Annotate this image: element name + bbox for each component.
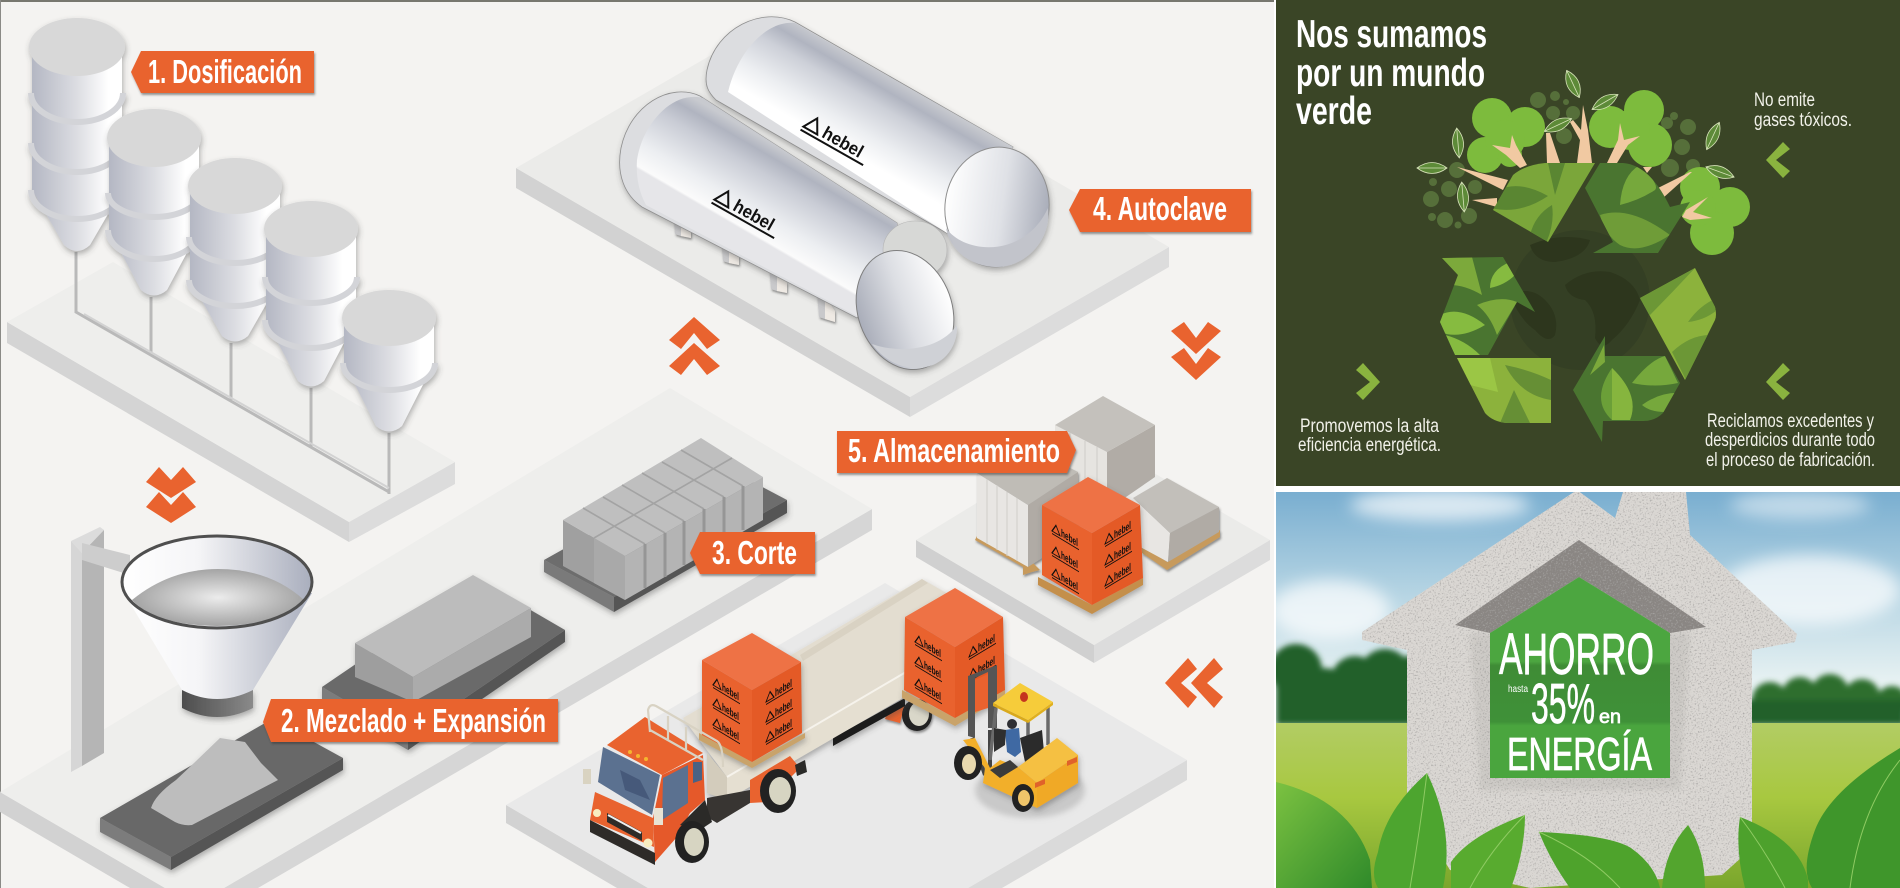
panel: energy saving photo [1270,489,1900,888]
text: savings [1498,632,1652,771]
back tank [706,17,1057,274]
label: step 5 [837,431,1076,473]
logo: hebel front tank [711,185,784,239]
silo 2 [107,109,201,296]
logos: forklift pallet left face: hebel [924,680,941,703]
arrow segment: left [1440,257,1535,355]
arrow segment: top right [1585,163,1690,253]
logo: hebel back tank: hebel [819,123,867,162]
label: step 2 [263,699,558,742]
tall grey stack [1055,396,1155,520]
logo: hebel back tank [800,112,873,166]
left white stack [975,448,1078,575]
orange pallet [1038,477,1143,614]
expansion tray with block [322,575,565,750]
background dots [1423,91,1700,228]
heading: verde [1296,90,1372,133]
platform: mixing and cutting [0,388,872,888]
body [963,738,1078,808]
text: energy efficiency: Promovemos la alta [1300,416,1439,437]
logos: storage pallet right face: hebel [1114,539,1131,562]
storage pallets [975,396,1220,614]
truck [583,579,1005,865]
arrow segment: right [1640,268,1716,380]
meadow [1276,723,1900,888]
recess shading [1470,633,1690,790]
panel: green world [1276,0,1900,486]
autoclave tanks [620,17,1057,383]
logos: near pallet right face: hebel [775,696,792,719]
heading [1296,13,1487,133]
arrow: down to storage [1171,322,1221,380]
logos: storage pallet left face: hebel [1061,526,1078,549]
front tank [620,92,970,383]
text: savings: 35% [1531,672,1595,736]
chassis [707,790,750,823]
logos: forklift pallet left face: hebel [924,637,941,660]
funnel mixer [71,527,312,772]
label: step 5: 5. Almacenamiento [848,432,1060,469]
logos: near pallet right face: hebel [775,676,792,699]
logos: storage pallet right face: hebel [1114,560,1131,583]
cargo: orange pallet on forks [902,588,1005,726]
clouds [1270,489,1900,640]
trailer wheel and fender [885,699,932,731]
text: savings: ENERGÍA [1507,728,1652,780]
logos: forklift pallet right face [969,631,996,682]
label: step 2: 2. Mezclado + Expansión [281,702,546,739]
forklift shadow [975,762,1085,818]
support feet [673,210,835,322]
green sign [1490,577,1670,778]
cab guard rail [648,705,723,767]
panel: production process [0,0,1274,888]
chevron: recycling [1766,363,1790,400]
rear axle wheel [750,756,807,813]
arrow segment: bottom right [1573,336,1680,442]
logos: storage pallet right face: hebel [1114,518,1131,541]
cargo: orange pallet near [699,633,805,768]
recess roof shadow [1455,540,1706,633]
arrow: left to truck [1165,658,1223,708]
label: step 3: 3. Corte [712,534,797,571]
logos: forklift pallet right face: hebel [978,631,995,654]
logos: storage pallet left face: hebel [1061,548,1078,571]
text: no toxic gases [1754,90,1852,131]
right stack [1133,478,1220,570]
chevron: energy efficiency [1356,363,1380,400]
arrow segment: top left [1493,163,1595,242]
foreground leaves [1276,748,1900,888]
logos: storage pallet left face: hebel [1061,570,1078,593]
tree trunks [1457,105,1712,220]
heading: Nos sumamos [1296,13,1487,56]
silo 4 [264,201,358,386]
text: no toxic gases: gases tóxicos. [1754,110,1852,131]
trailer bed [683,579,955,800]
label: step 4: 4. Autoclave [1093,190,1227,227]
text: no toxic gases: No emite [1754,90,1815,111]
logos: near pallet left face: hebel [722,680,739,703]
label: step 4 [1069,189,1251,232]
logos: near pallet left face: hebel [722,700,739,723]
arrow: up to autoclave [669,317,720,375]
forklift [954,665,1085,818]
globe [1510,230,1650,370]
silo 5 [342,290,436,432]
logos: storage pallet left face [1052,521,1079,594]
logos: near pallet left face [713,675,740,744]
logos: near pallet left face: hebel [722,720,739,743]
logos: forklift pallet left face: hebel [924,658,941,681]
front wheel [675,800,712,863]
cabin posts [990,707,1048,760]
tree canopies [1467,90,1750,255]
text: savings: en [1599,707,1621,728]
rail and silo legs [76,252,389,494]
label: step 1: 1. Dosificación [148,53,302,90]
text: energy efficiency [1298,416,1441,456]
sky [1276,492,1900,727]
logos: near pallet right face: hebel [775,716,792,739]
recycling arrows [1440,163,1716,442]
logos: near pallet right face [766,676,793,745]
cab [583,717,705,865]
platform: autoclave [516,18,1169,417]
chevron: no toxic gases [1766,142,1790,178]
tree lines [1270,644,1900,725]
text: recycling [1705,411,1875,471]
roof and beacon [993,683,1053,723]
logos: forklift pallet left face [915,632,942,704]
arrow segment: bottom left [1457,358,1551,423]
arrow: down to mixer [146,467,196,523]
label: step 1 [131,51,314,93]
silo 3 [188,158,282,342]
wheels [954,746,1034,812]
text: savings: hasta [1508,684,1528,695]
text: savings: AHORRO [1499,622,1654,687]
silo 1 [29,18,125,251]
platform: storage [916,435,1270,663]
platform: dosing [7,262,455,542]
heading: por un mundo [1296,52,1485,95]
mixing tray with wet mix [100,719,343,870]
cutting tray with blocks [544,438,787,612]
driver [994,719,1044,762]
text: energy efficiency: eficiencia energética. [1298,435,1441,456]
mast [968,665,997,775]
logo: hebel front tank: hebel [730,196,778,235]
leaves [1417,68,1736,212]
logos: storage pallet right face [1105,518,1132,589]
platform: loading [506,583,1187,888]
concrete house [1362,490,1797,888]
logos: forklift pallet right face: hebel [978,653,995,676]
label: step 3 [690,532,815,574]
